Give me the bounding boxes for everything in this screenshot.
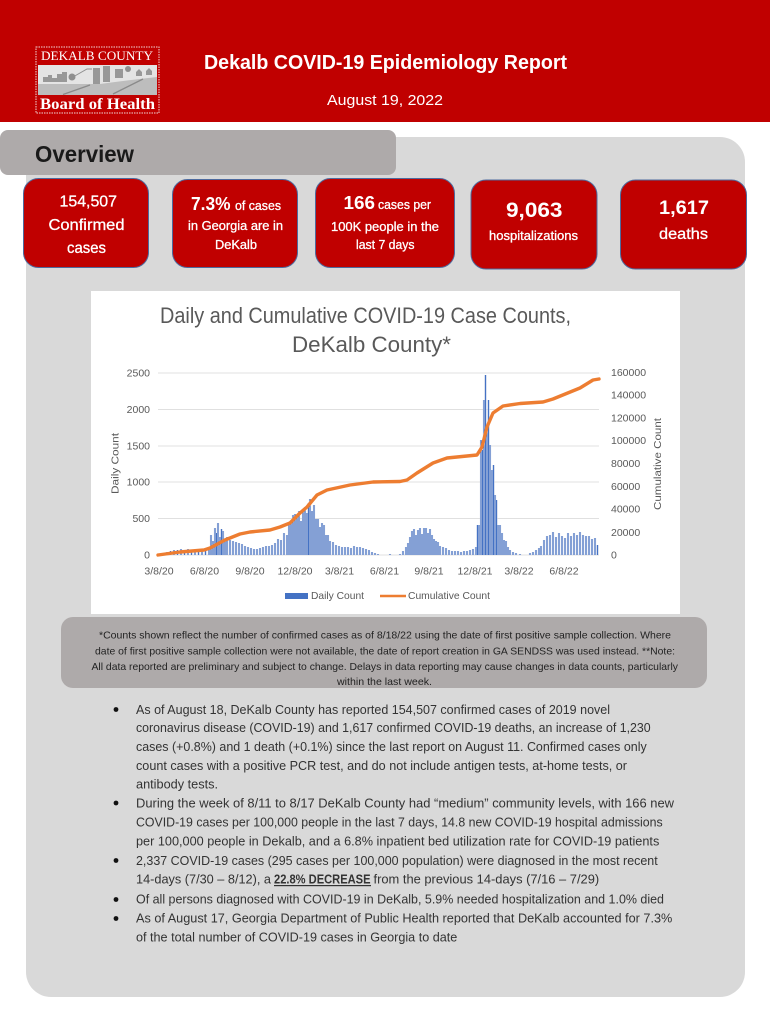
right axis title: Cumulative Count: [652, 418, 664, 510]
card: share of Georgia cases: [172, 180, 298, 268]
x axis labels: [144, 566, 579, 578]
left axis labels: 2500: [127, 368, 150, 380]
bullet: share of Georgia total: [114, 912, 672, 944]
card: cases per 100K: 166: [344, 192, 375, 213]
right axis labels: 40000: [611, 504, 640, 516]
bullet: community levels: [114, 796, 675, 848]
x axis labels: 6/8/20: [190, 566, 219, 578]
left axis labels: [127, 368, 150, 562]
card: hospitalizations: hospitalizations: [489, 228, 578, 243]
card: confirmed cases: Confirmed: [48, 217, 124, 234]
callout: data note: *Counts shown reflect the number of confirmed cases as of 8/18/22 using the date of first positive sample collection. Where: [99, 630, 671, 642]
report title: Dekalb COVID-19 Epidemiology Report: [204, 51, 567, 74]
logo: DeKalb County Board of Health: Board of Health: [40, 96, 155, 113]
left axis labels: 2000: [127, 404, 150, 416]
callout: data note: All data reported are preliminary and subject to change. Delays in data reporting may cause changes in data counts, particularly: [92, 661, 679, 673]
bullet: share of Georgia total: As of August 17, Georgia Department of Public Health reported that DeKalb accounted for 7.3%: [136, 912, 672, 926]
bullet: 14-day comparison: 22.8% DECREASE: [274, 872, 370, 886]
x axis labels: 6/8/21: [370, 566, 399, 578]
bullet: 14-day comparison: 2,337 COVID-19 cases (295 cases per 100,000 population) were diagnosed in the most recent: [136, 854, 658, 868]
callout: data note: within the last week.: [336, 676, 432, 688]
left axis labels: 0: [144, 550, 150, 562]
x axis labels: 12/8/21: [457, 566, 493, 578]
daily count bars: [160, 375, 598, 555]
card: share of Georgia cases: in Georgia are in: [188, 218, 283, 233]
right axis labels: 80000: [611, 458, 640, 470]
right axis labels: 140000: [611, 390, 646, 402]
heading bar: Overview: [0, 130, 396, 175]
bullet: 14-day comparison: 14-days (7/30 – 8/12), a: [136, 872, 271, 886]
card: deaths: 1,617: [659, 198, 709, 219]
bullet: community levels: COVID-19 cases per 100,000 people in the last 7 days, 14.8 new COVID-19 hospital admissions: [136, 816, 663, 830]
right axis labels: 0: [611, 550, 617, 562]
card: confirmed cases: cases: [67, 240, 106, 257]
bullet: 14-day comparison: [114, 854, 658, 886]
card: share of Georgia cases: of cases: [235, 198, 281, 213]
x axis labels: 9/8/21: [414, 566, 444, 578]
left axis labels: 500: [132, 513, 150, 525]
logo: DeKalb County Board of Health: [36, 47, 159, 113]
right axis labels: 100000: [611, 435, 646, 447]
card: deaths: [620, 180, 746, 269]
bullet: case and death totals: cases (+0.8%) and 1 death (+0.1%) since the last report on August 11. Confirmed cases only: [136, 740, 647, 754]
card: share of Georgia cases: DeKalb: [215, 237, 257, 252]
header banner: [0, 0, 770, 122]
card: deaths: deaths: [659, 226, 708, 243]
left axis labels: 1000: [127, 476, 150, 488]
left axis title: Daily Count: [110, 433, 122, 494]
chart legend: Cumulative Count: [408, 590, 490, 602]
chart legend: Daily Count: [311, 590, 364, 602]
bullet: 14-day comparison: from the previous 14-days (7/16 – 7/29): [374, 872, 599, 886]
left axis labels: 1500: [127, 440, 150, 452]
card: confirmed cases: [24, 178, 148, 268]
logo: DeKalb County Board of Health: DEKALB COUNTY: [41, 49, 153, 63]
panel: overview background: [26, 137, 745, 997]
bullet: case and death totals: antibody tests.: [136, 778, 218, 792]
x axis labels: 6/8/22: [549, 566, 579, 578]
card: hospitalizations: 9,063: [506, 198, 563, 222]
right axis labels: 60000: [611, 481, 640, 493]
bullet: outcomes: Of all persons diagnosed with COVID-19 in DeKalb, 5.9% needed hospitalization and 1.0% died: [136, 892, 664, 906]
bullet: case and death totals: As of August 18, DeKalb County has reported 154,507 confirmed cases of 2019 novel: [136, 703, 610, 717]
chart legend: [285, 590, 490, 602]
card: cases per 100K: [316, 178, 454, 268]
callout: data note: [61, 617, 707, 688]
card: cases per 100K: 100K people in the: [331, 219, 439, 234]
heading bar: Overview: Overview: [35, 141, 135, 167]
card: confirmed cases: 154,507: [60, 194, 117, 210]
bullet: share of Georgia total: of the total number of COVID-19 cases in Georgia to date: [136, 930, 457, 944]
bullet list: key findings: [114, 703, 675, 944]
bullet: community levels: During the week of 8/11 to 8/17 DeKalb County had “medium” community levels, with 166 new: [136, 796, 675, 810]
bullet: case and death totals: count cases with a positive PCR test, and do not include antigen tests, at-home tests, or: [136, 759, 627, 773]
right axis labels: [611, 367, 646, 562]
chart panel: daily and cumulative case counts: [91, 291, 680, 614]
report date: August 19, 2022: [327, 92, 443, 109]
x axis labels: 3/8/21: [325, 566, 354, 578]
cumulative count line: [158, 379, 599, 555]
card: cases per 100K: cases per: [378, 197, 432, 212]
chart title: Daily and Cumulative COVID-19 Case Counts,: [160, 303, 571, 328]
right axis labels: 20000: [611, 527, 640, 539]
card: hospitalizations: [471, 180, 597, 269]
chart title: [160, 303, 571, 357]
bullet: community levels: per 100,000 people in Dekalb, and a 6.8% inpatient bed utilization rate for COVID-19 patients: [136, 834, 659, 848]
x axis labels: 12/8/20: [277, 566, 313, 578]
x axis labels: 3/8/22: [504, 566, 534, 578]
card: cases per 100K: last 7 days: [356, 237, 415, 252]
right axis labels: 160000: [611, 367, 646, 379]
chart title: DeKalb County*: [292, 332, 451, 357]
callout: data note: date of first positive sample collection were not available, the date of report creation in GA SENDSS was used instead. **Note:: [95, 646, 675, 658]
x axis labels: 9/8/20: [235, 566, 265, 578]
x axis labels: 3/8/20: [144, 566, 174, 578]
bullet: case and death totals: coronavirus disease (COVID-19) and 1,617 confirmed COVID-19 deaths, an increase of 1,230: [136, 721, 651, 735]
card: share of Georgia cases: 7.3%: [191, 193, 230, 214]
bullet: case and death totals: [114, 703, 651, 792]
right axis labels: 120000: [611, 412, 646, 424]
